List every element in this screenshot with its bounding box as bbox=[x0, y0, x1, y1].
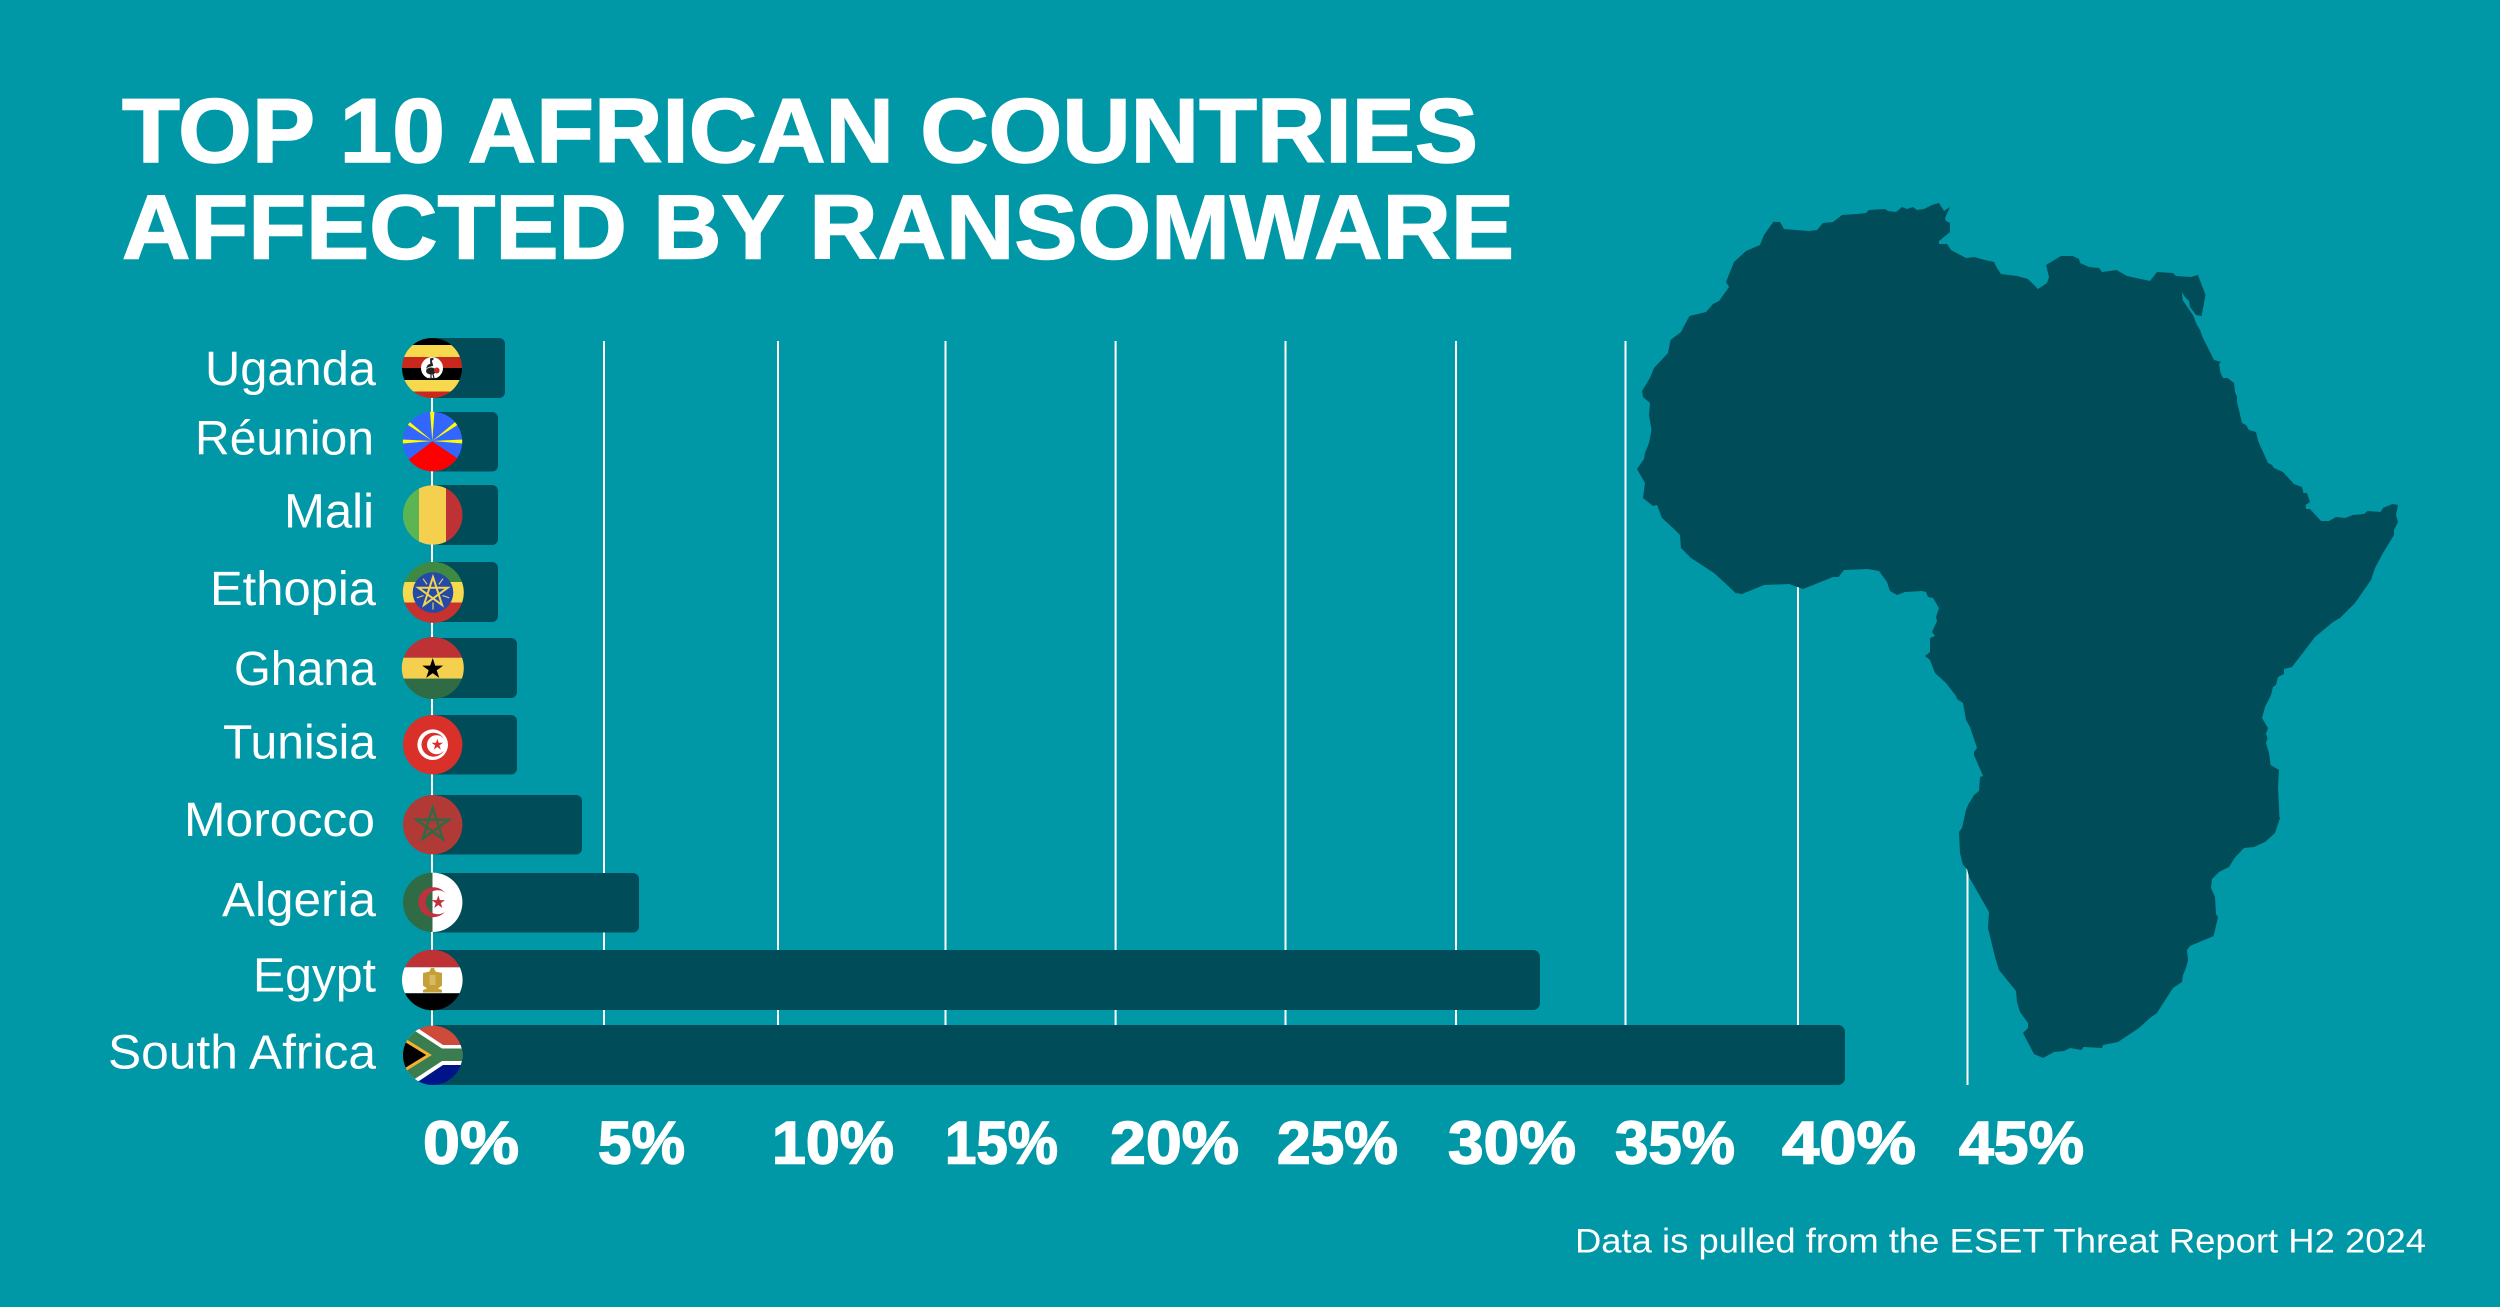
bar: Morocco bbox=[430, 795, 582, 854]
flag: Tunisia bbox=[403, 715, 462, 774]
flag: Réunion bbox=[402, 412, 462, 472]
x-axis percentage labels: 40% bbox=[1782, 1109, 1916, 1176]
row: Ghana bbox=[234, 635, 517, 701]
x-axis percentage labels: 35% bbox=[1615, 1109, 1735, 1176]
label: Tunisia: Tunisia bbox=[223, 716, 376, 769]
horizontal bar chart bbox=[108, 336, 1968, 1097]
label: Ghana: Ghana bbox=[234, 643, 376, 696]
bar: Algeria bbox=[430, 873, 639, 932]
flag: Morocco bbox=[403, 795, 462, 854]
bar: Réunion bbox=[430, 412, 498, 472]
source note: Data is pulled from the ESET Threat Report H2 2024 bbox=[1575, 1223, 2426, 1261]
row: Morocco bbox=[184, 793, 582, 857]
row: Mali bbox=[284, 483, 498, 547]
x-axis percentage labels: 25% bbox=[1277, 1109, 1398, 1176]
label: Egypt: Egypt bbox=[253, 950, 376, 1003]
x-axis percentage labels: 15% bbox=[945, 1109, 1058, 1176]
row: Egypt bbox=[253, 948, 1540, 1012]
row: Uganda bbox=[205, 336, 505, 400]
row: Réunion bbox=[198, 412, 498, 472]
x-axis percentage labels: 10% bbox=[772, 1109, 894, 1176]
label: Mali: Mali bbox=[284, 486, 374, 539]
label: Algeria: Algeria bbox=[222, 874, 376, 927]
bar: Egypt bbox=[430, 950, 1540, 1010]
bar: Ghana bbox=[430, 638, 517, 698]
bar: Ethopia bbox=[430, 562, 498, 622]
title: TOP 10 AFRICAN COUNTRIES bbox=[122, 81, 1478, 182]
bar: Uganda bbox=[430, 338, 505, 398]
map of Africa bbox=[1637, 203, 2398, 1058]
flag: South Africa bbox=[403, 1026, 462, 1085]
bar: South Africa bbox=[430, 1025, 1845, 1085]
x-axis percentage labels: 5% bbox=[598, 1109, 685, 1176]
x-axis percentage labels bbox=[423, 1109, 2084, 1176]
flag: Uganda bbox=[402, 338, 462, 398]
flag: Algeria bbox=[403, 872, 462, 932]
flag: Egypt bbox=[402, 950, 463, 1010]
flag: Ethiopia bbox=[402, 562, 464, 623]
row: Algeria bbox=[222, 870, 639, 934]
bar: Mali bbox=[430, 485, 498, 545]
row: Tunisia bbox=[223, 713, 517, 777]
row: Ethopia bbox=[210, 560, 498, 624]
title bbox=[122, 81, 1514, 278]
x-axis percentage labels: 20% bbox=[1110, 1109, 1239, 1176]
bar: Tunisia bbox=[430, 715, 517, 774]
label: South Africa: South Africa bbox=[108, 1026, 376, 1079]
x-axis percentage labels: 45% bbox=[1959, 1109, 2084, 1176]
row: South Africa bbox=[110, 1025, 1845, 1085]
label: Ethopia: Ethopia bbox=[210, 563, 376, 616]
label: Morocco: Morocco bbox=[184, 794, 375, 847]
label: Uganda: Uganda bbox=[205, 343, 376, 396]
label: Réunion: Réunion bbox=[195, 412, 374, 465]
x-axis percentage labels: 0% bbox=[423, 1109, 519, 1176]
title: AFFECTED BY RANSOMWARE bbox=[122, 177, 1514, 278]
x-axis percentage labels: 30% bbox=[1448, 1109, 1576, 1176]
flag: Mali bbox=[402, 485, 462, 545]
flag: Ghana bbox=[402, 637, 464, 699]
